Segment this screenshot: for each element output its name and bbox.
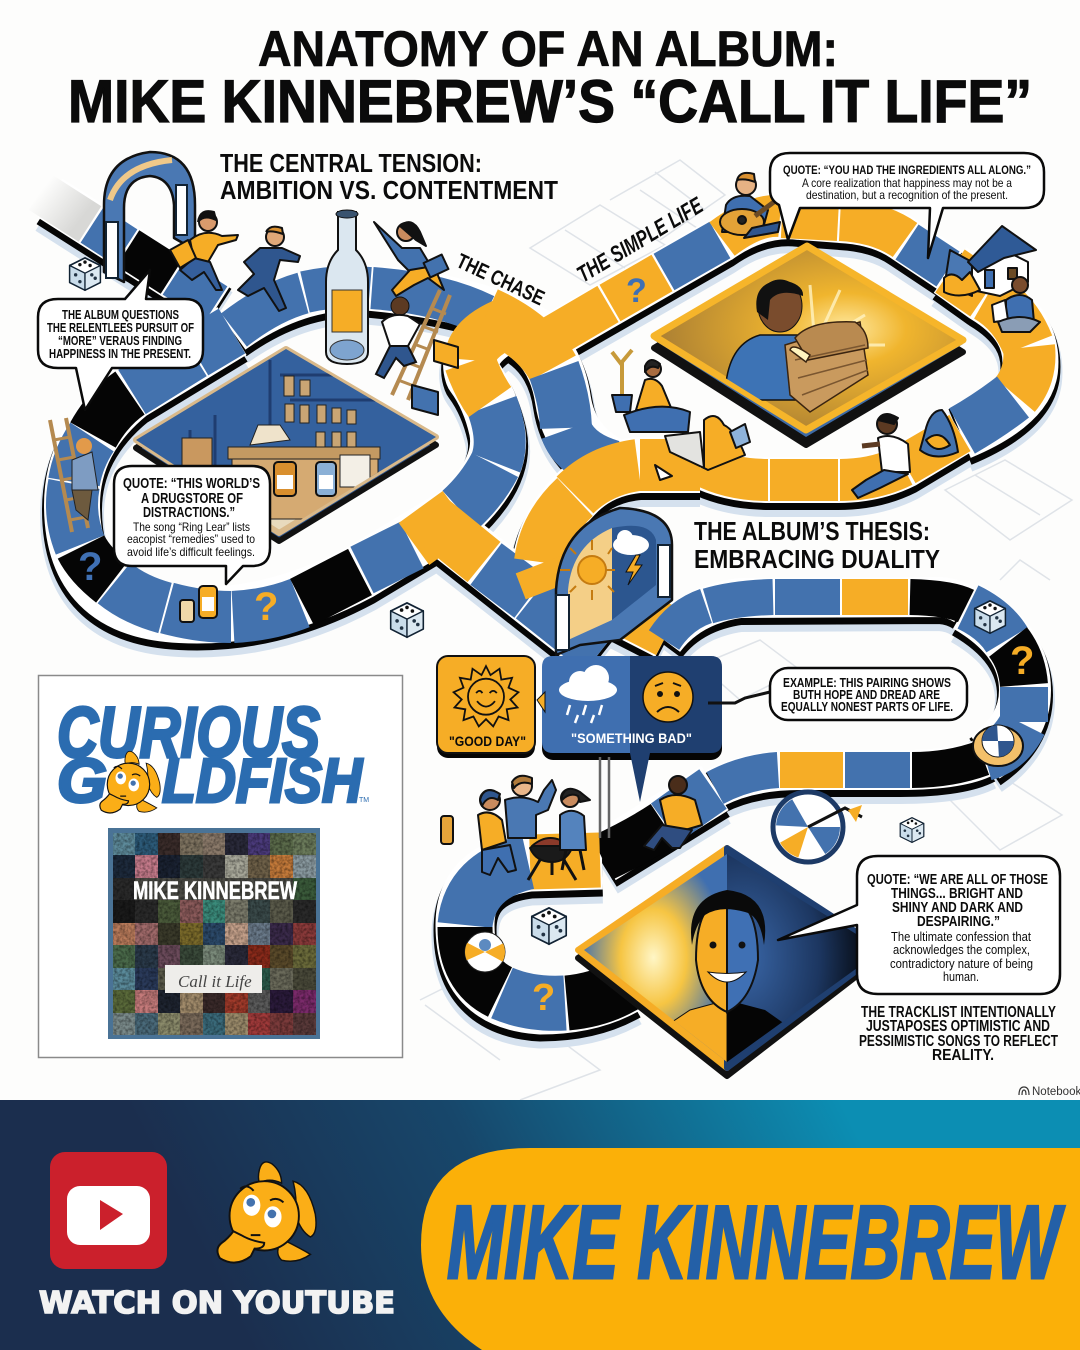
- game board path: [40, 192, 1030, 1015]
- heading: album thesis: THE ALBUM’S THESIS:: [694, 516, 930, 546]
- question marks on tiles: ?: [626, 272, 647, 310]
- heading: central tension: AMBITION VS. CONTENTMENT: [220, 175, 558, 205]
- icon: house: [944, 226, 1036, 296]
- logo: curious goldfish: CURIOUS: [57, 694, 320, 773]
- question marks on tiles: ?: [532, 977, 555, 1019]
- callout: drugstore quote: The song “Ring Lear” lists: [133, 520, 250, 534]
- callout: example pairing: EXAMPLE: THIS PAIRING SHOWS: [783, 675, 951, 690]
- icon: fish mascot: [217, 1162, 316, 1263]
- callout: example pairing: EQUALLY NONEST PARTS OF LIFE.: [781, 699, 953, 714]
- callout: drugstore quote: avoid life’s difficult feelings.: [127, 545, 255, 559]
- sitting worried man: [644, 776, 702, 850]
- panel: logo and album: [38, 676, 402, 1058]
- album cover: Call it Life: [178, 972, 252, 991]
- leaping woman: [374, 222, 448, 296]
- callout: ingredients quote: destination, but a recognition of the present.: [806, 188, 1008, 202]
- die: top left: [70, 258, 100, 290]
- callout: drugstore quote: [114, 466, 270, 584]
- briefcases: [412, 340, 458, 415]
- callout: example pairing: [770, 668, 967, 720]
- callout: drugstore quote: DISTRACTIONS.”: [143, 504, 235, 521]
- watermark: notebook: Notebook: [1032, 1086, 1080, 1098]
- callout: confession quote: The ultimate confession that: [891, 929, 1031, 944]
- callout: album questions: THE RELENTLEES PURSUIT OF: [47, 321, 194, 335]
- small wheel on track: [973, 725, 1023, 766]
- gateway arch: duality: [556, 508, 672, 655]
- icon: youtube: [50, 1152, 167, 1269]
- ladder figure: left: [50, 418, 98, 532]
- callout: confession quote: [778, 856, 1060, 994]
- relaxing man: [852, 414, 910, 498]
- question marks on tiles: ?: [78, 545, 102, 589]
- label: watch on youtube: WATCH ON YOUTUBE: [39, 1286, 395, 1321]
- callout: album questions: “MORE” VERAUS FINDING: [58, 334, 182, 348]
- logo: curious goldfish: [57, 694, 369, 816]
- panel: drugstore diamond: [130, 345, 440, 541]
- panel: treasure diamond: [654, 246, 963, 445]
- question marks on tiles: [78, 272, 1034, 1019]
- callout: confession quote: human.: [943, 969, 979, 984]
- panel: duality diamond: [578, 848, 887, 1076]
- simple life tiles: [550, 216, 948, 338]
- icon: game spinner on black tile: [465, 932, 505, 972]
- ambition oval tiles: [72, 313, 612, 617]
- question marks on tiles: ?: [254, 585, 278, 629]
- name pill: [421, 1148, 1080, 1350]
- title: [68, 21, 1032, 135]
- panel: something bad: "SOMETHING BAD": [571, 731, 692, 746]
- logo: curious goldfish: LDFISH: [162, 747, 363, 816]
- callout: album questions: THE ALBUM QUESTIONS: [62, 308, 179, 322]
- heading: central tension: THE CENTRAL TENSION:: [220, 148, 482, 178]
- callout: confession quote: THINGS... BRIGHT AND: [891, 886, 1023, 902]
- diagonal lane tiles: [425, 514, 668, 652]
- icon: die lower: [391, 603, 423, 637]
- question marks on tiles: ?: [1010, 639, 1034, 683]
- heading: album thesis: [694, 516, 940, 574]
- man in sweater: [725, 280, 810, 400]
- chase lane tiles: [234, 287, 485, 330]
- sad face icon: [643, 672, 693, 722]
- text block: tracklist: REALITY.: [932, 1047, 994, 1064]
- panel: something bad: [537, 656, 722, 802]
- text block: tracklist: [859, 1004, 1058, 1064]
- icon: small die right: [900, 818, 924, 842]
- callout: drugstore quote: A DRUGSTORE OF: [141, 490, 243, 507]
- callout: album questions: HAPPINESS IN THE PRESENT.: [49, 347, 191, 361]
- heading: album thesis: EMBRACING DUALITY: [694, 544, 940, 574]
- bag on tile: [920, 410, 958, 457]
- guitar player: [720, 173, 786, 238]
- callout: drugstore quote: eacopist “remedies” used to: [127, 532, 255, 546]
- icon: die in curve: [532, 908, 566, 944]
- label: the simple life: THE SIMPLE LIFE: [572, 192, 708, 287]
- arrow: example to sad face: [708, 692, 770, 703]
- callout: confession quote: SHINY AND DARK AND: [892, 900, 1023, 916]
- pole below panel: [600, 757, 609, 838]
- callout: drugstore quote: QUOTE: “THIS WORLD’S: [123, 475, 260, 492]
- album cover: [108, 828, 320, 1039]
- family barbecue: [441, 776, 590, 880]
- callout: ingredients quote: QUOTE: “YOU HAD THE INGREDIENTS ALL ALONG.”: [783, 163, 1031, 177]
- callout: example pairing: BUTH HOPE AND DREAD ARE: [793, 687, 940, 702]
- logo fish: [100, 751, 160, 813]
- right loop tiles: [950, 271, 1029, 431]
- bottle: [326, 210, 368, 364]
- logo: curious goldfish: G: [57, 747, 107, 816]
- album cover: MIKE KINNEBREW: [133, 877, 297, 905]
- heading: central tension: [220, 148, 558, 205]
- gateway arch: start: [104, 152, 195, 282]
- icon: spinner wheel: [773, 792, 862, 862]
- panel: good day: "GOOD DAY": [449, 734, 526, 749]
- panel: good day: [437, 656, 535, 758]
- footer banner: [0, 1100, 1080, 1350]
- icon: pill bottles: [180, 586, 217, 622]
- callout: ingredients quote: [770, 153, 1044, 258]
- callout: ingredients quote: A core realization that happiness may not be a: [802, 176, 1012, 190]
- treasure chest: [785, 322, 868, 412]
- die on track: [975, 601, 1005, 633]
- woman with laptop: [992, 277, 1040, 332]
- rubble: scattered papers and broken floor: [655, 416, 750, 480]
- runner man: [238, 227, 300, 311]
- logo: curious goldfish: TM: [359, 797, 369, 804]
- callout: album questions: [38, 270, 203, 410]
- duality lane tiles: [664, 597, 983, 788]
- callout: confession quote: contradictory nature of being: [890, 956, 1033, 971]
- rain cloud icon: [559, 665, 617, 723]
- callout: confession quote: acknowledges the complex,: [893, 942, 1030, 957]
- sun face icon: [454, 666, 518, 726]
- title: ANATOMY OF AN ALBUM:: [258, 21, 838, 77]
- label: the chase: THE CHASE: [453, 250, 548, 310]
- callout: confession quote: DESPAIRING.”: [917, 914, 1000, 930]
- sun on door: [560, 540, 615, 600]
- storm cloud on door: [613, 530, 649, 585]
- woman with dying plant: [612, 350, 690, 432]
- ladder: climber: [376, 290, 450, 400]
- start lane tiles: [40, 192, 216, 304]
- runner woman with briefcase: [170, 211, 238, 290]
- drugstore bottles: [274, 462, 336, 496]
- glow rays: [810, 285, 885, 345]
- half-lit face: [674, 890, 782, 1062]
